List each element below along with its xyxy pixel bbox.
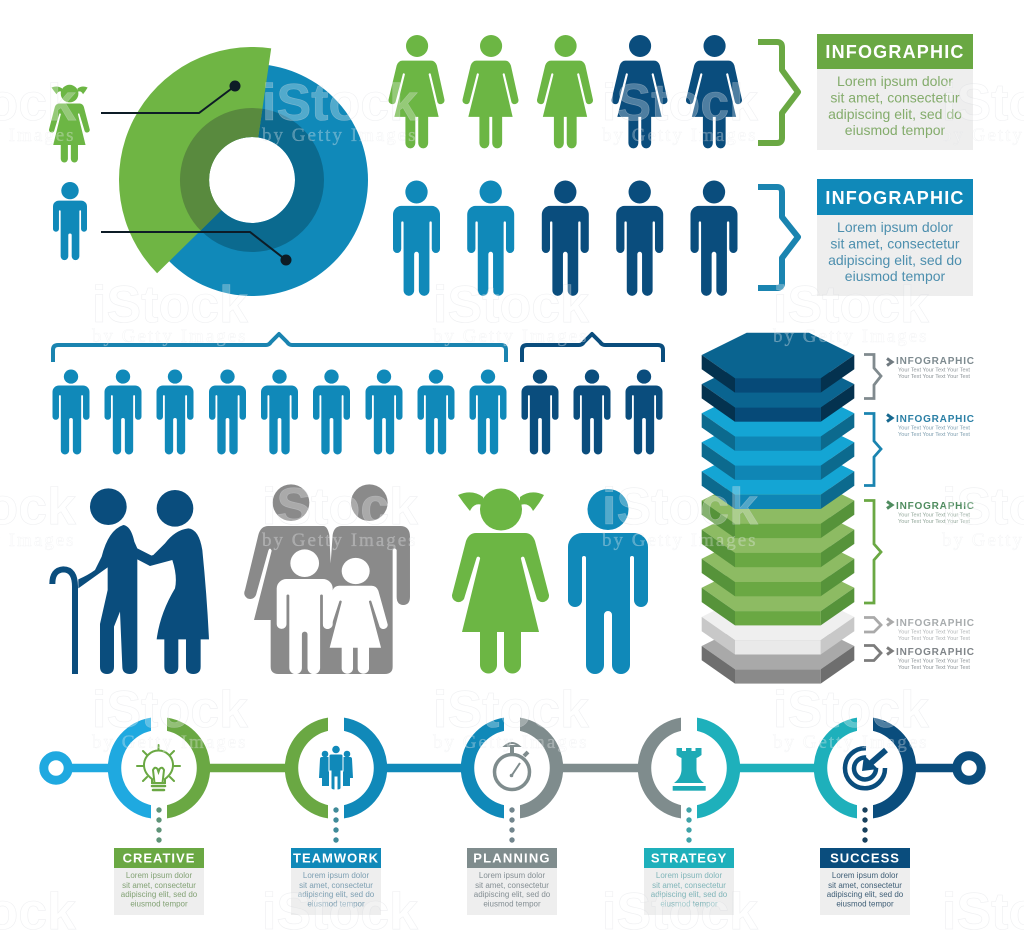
watermark: by Getty Images (433, 732, 589, 753)
stack label 1: Your Text Your Text Your Text (898, 368, 970, 374)
panel: blue infographic: adipiscing elit, sed do (828, 252, 962, 268)
stack label 5: Your Text Your Text Your Text (898, 658, 970, 664)
stack label 5: Your Text Your Text Your Text (898, 665, 970, 671)
panel: green infographic: INFOGRAPHIC (825, 42, 965, 62)
icon: family (244, 484, 410, 674)
watermark: iStock (433, 276, 589, 334)
success ring (814, 718, 916, 843)
panel: blue infographic (817, 179, 973, 296)
teamwork ring (285, 718, 387, 843)
stack label 1: INFOGRAPHIC (896, 356, 975, 367)
stack label 4: Your Text Your Text Your Text (898, 630, 970, 636)
watermark: iStock (92, 276, 248, 334)
stack label 2: Your Text Your Text Your Text (898, 426, 970, 432)
icon: small girl (49, 85, 90, 162)
brace: blue (758, 187, 798, 288)
success header (820, 848, 910, 868)
success header: SUCCESS (830, 850, 900, 866)
panel: green infographic: Lorem ipsum dolor (837, 73, 953, 89)
stack label 3: INFOGRAPHIC (896, 501, 975, 512)
creative text: Lorem ipsum dolor (126, 871, 192, 880)
step: strategy (638, 718, 740, 915)
watermark: iStock (262, 478, 418, 536)
creative text (114, 868, 204, 915)
watermark: by Getty Images (92, 732, 248, 753)
planning header: PLANNING (473, 850, 551, 866)
brace: green (758, 42, 798, 143)
donut chart (119, 47, 368, 296)
stack label 4 (864, 618, 975, 642)
stack label 1: Your Text Your Text Your Text (898, 374, 970, 380)
icon: stopwatch (494, 743, 530, 790)
success text (820, 868, 910, 915)
watermark: iStock (433, 681, 589, 739)
brace: row blue (53, 334, 506, 362)
callout line: boy (101, 232, 290, 264)
teamwork text: sit amet, consectetur (299, 881, 373, 890)
watermark: iStock (602, 74, 758, 132)
planning text (467, 868, 557, 915)
step: planning (461, 718, 563, 915)
planning text: sit amet, consectetur (475, 881, 549, 890)
icon: large boy (568, 489, 648, 674)
stack label 3 (864, 500, 975, 603)
stack label 5 (864, 646, 975, 671)
watermark: iStock (262, 74, 418, 132)
planning ring (461, 718, 563, 843)
step: success (814, 718, 916, 915)
icon: elderly couple (52, 488, 209, 674)
brace: row dark (522, 334, 663, 362)
stack label 3: Your Text Your Text Your Text (898, 519, 970, 525)
creative text: eiusmod tempor (130, 900, 188, 908)
icon: target (845, 748, 886, 788)
stack label 4: INFOGRAPHIC (896, 618, 975, 629)
timeline start node (44, 756, 68, 780)
teamwork text: eiusmod tempor (307, 900, 365, 908)
creative text: adipiscing elit, sed do (121, 890, 198, 899)
teamwork text (291, 868, 381, 915)
icon: rook (673, 748, 706, 791)
creative ring (108, 718, 210, 843)
watermark: by Getty Images (262, 125, 418, 146)
hexagon stack (702, 333, 854, 684)
icon: large girl (452, 488, 549, 674)
strategy header: STRATEGY (651, 850, 727, 866)
planning header (467, 848, 557, 868)
success text: adipiscing elit, sed do (827, 890, 904, 899)
panel: blue infographic: eiusmod tempor (845, 268, 946, 284)
creative text: sit amet, consectetur (122, 881, 196, 890)
watermark: by Getty Images (433, 326, 589, 347)
stack label 2: INFOGRAPHIC (896, 414, 975, 425)
teamwork header: TEAMWORK (293, 850, 379, 866)
stack label 2: Your Text Your Text Your Text (898, 432, 970, 438)
watermark: by Getty Images (773, 732, 929, 753)
strategy text: Lorem ipsum dolor (656, 871, 722, 880)
strategy text: adipiscing elit, sed do (651, 890, 728, 899)
strategy text (644, 868, 734, 915)
panel: green infographic: sit amet, consectetur (830, 90, 960, 106)
success text: sit amet, consectetur (828, 881, 902, 890)
strategy ring (638, 718, 740, 843)
watermark: iStock (92, 681, 248, 739)
icon: small boy (53, 182, 87, 260)
watermark: by Getty Images (92, 326, 248, 347)
success text: eiusmod tempor (836, 900, 894, 908)
success text: Lorem ipsum dolor (832, 871, 898, 880)
teamwork text: Lorem ipsum dolor (303, 871, 369, 880)
panel: blue infographic: Lorem ipsum dolor (837, 219, 953, 235)
icon: team (319, 746, 353, 790)
panel: green infographic: adipiscing elit, sed do (828, 106, 962, 122)
watermark: by Getty Images (773, 326, 929, 347)
planning text: eiusmod tempor (483, 900, 541, 908)
watermark: iStock (773, 276, 929, 334)
watermark: iStock (773, 681, 929, 739)
panel: blue infographic: INFOGRAPHIC (825, 188, 965, 208)
people row: twelve men (52, 370, 662, 455)
strategy text: sit amet, consectetur (652, 881, 726, 890)
strategy header (644, 848, 734, 868)
step: teamwork (285, 718, 387, 915)
stack label 1 (864, 354, 975, 398)
watermark: by Getty Images (602, 530, 758, 551)
teamwork text: adipiscing elit, sed do (298, 890, 375, 899)
planning text: Lorem ipsum dolor (479, 871, 545, 880)
stack label 2 (864, 414, 975, 486)
callout line: girl (101, 82, 240, 113)
men row (393, 180, 738, 296)
watermark: by Getty Images (602, 125, 758, 146)
watermark: iStock (602, 478, 758, 536)
panel: blue infographic: sit amet, consectetur (830, 236, 960, 252)
timeline end node (957, 756, 981, 780)
strategy text: eiusmod tempor (660, 900, 718, 908)
donut: blue ring (136, 64, 368, 296)
planning text: adipiscing elit, sed do (474, 890, 551, 899)
stack label 5: INFOGRAPHIC (896, 647, 975, 658)
icon: lightbulb (137, 745, 180, 790)
donut: dark blue inner ring (180, 108, 324, 252)
stack label 4: Your Text Your Text Your Text (898, 636, 970, 642)
watermark: by Getty Images (262, 530, 418, 551)
panel: green infographic (817, 34, 973, 150)
timeline connectors (70, 764, 955, 772)
creative header (114, 848, 204, 868)
creative header: CREATIVE (123, 850, 195, 866)
women row (388, 35, 742, 148)
step: creative (108, 718, 210, 915)
donut: green sector (119, 47, 271, 273)
panel: green infographic: eiusmod tempor (845, 122, 946, 138)
donut: dark green inner sector (180, 108, 262, 230)
stack label 3: Your Text Your Text Your Text (898, 512, 970, 518)
